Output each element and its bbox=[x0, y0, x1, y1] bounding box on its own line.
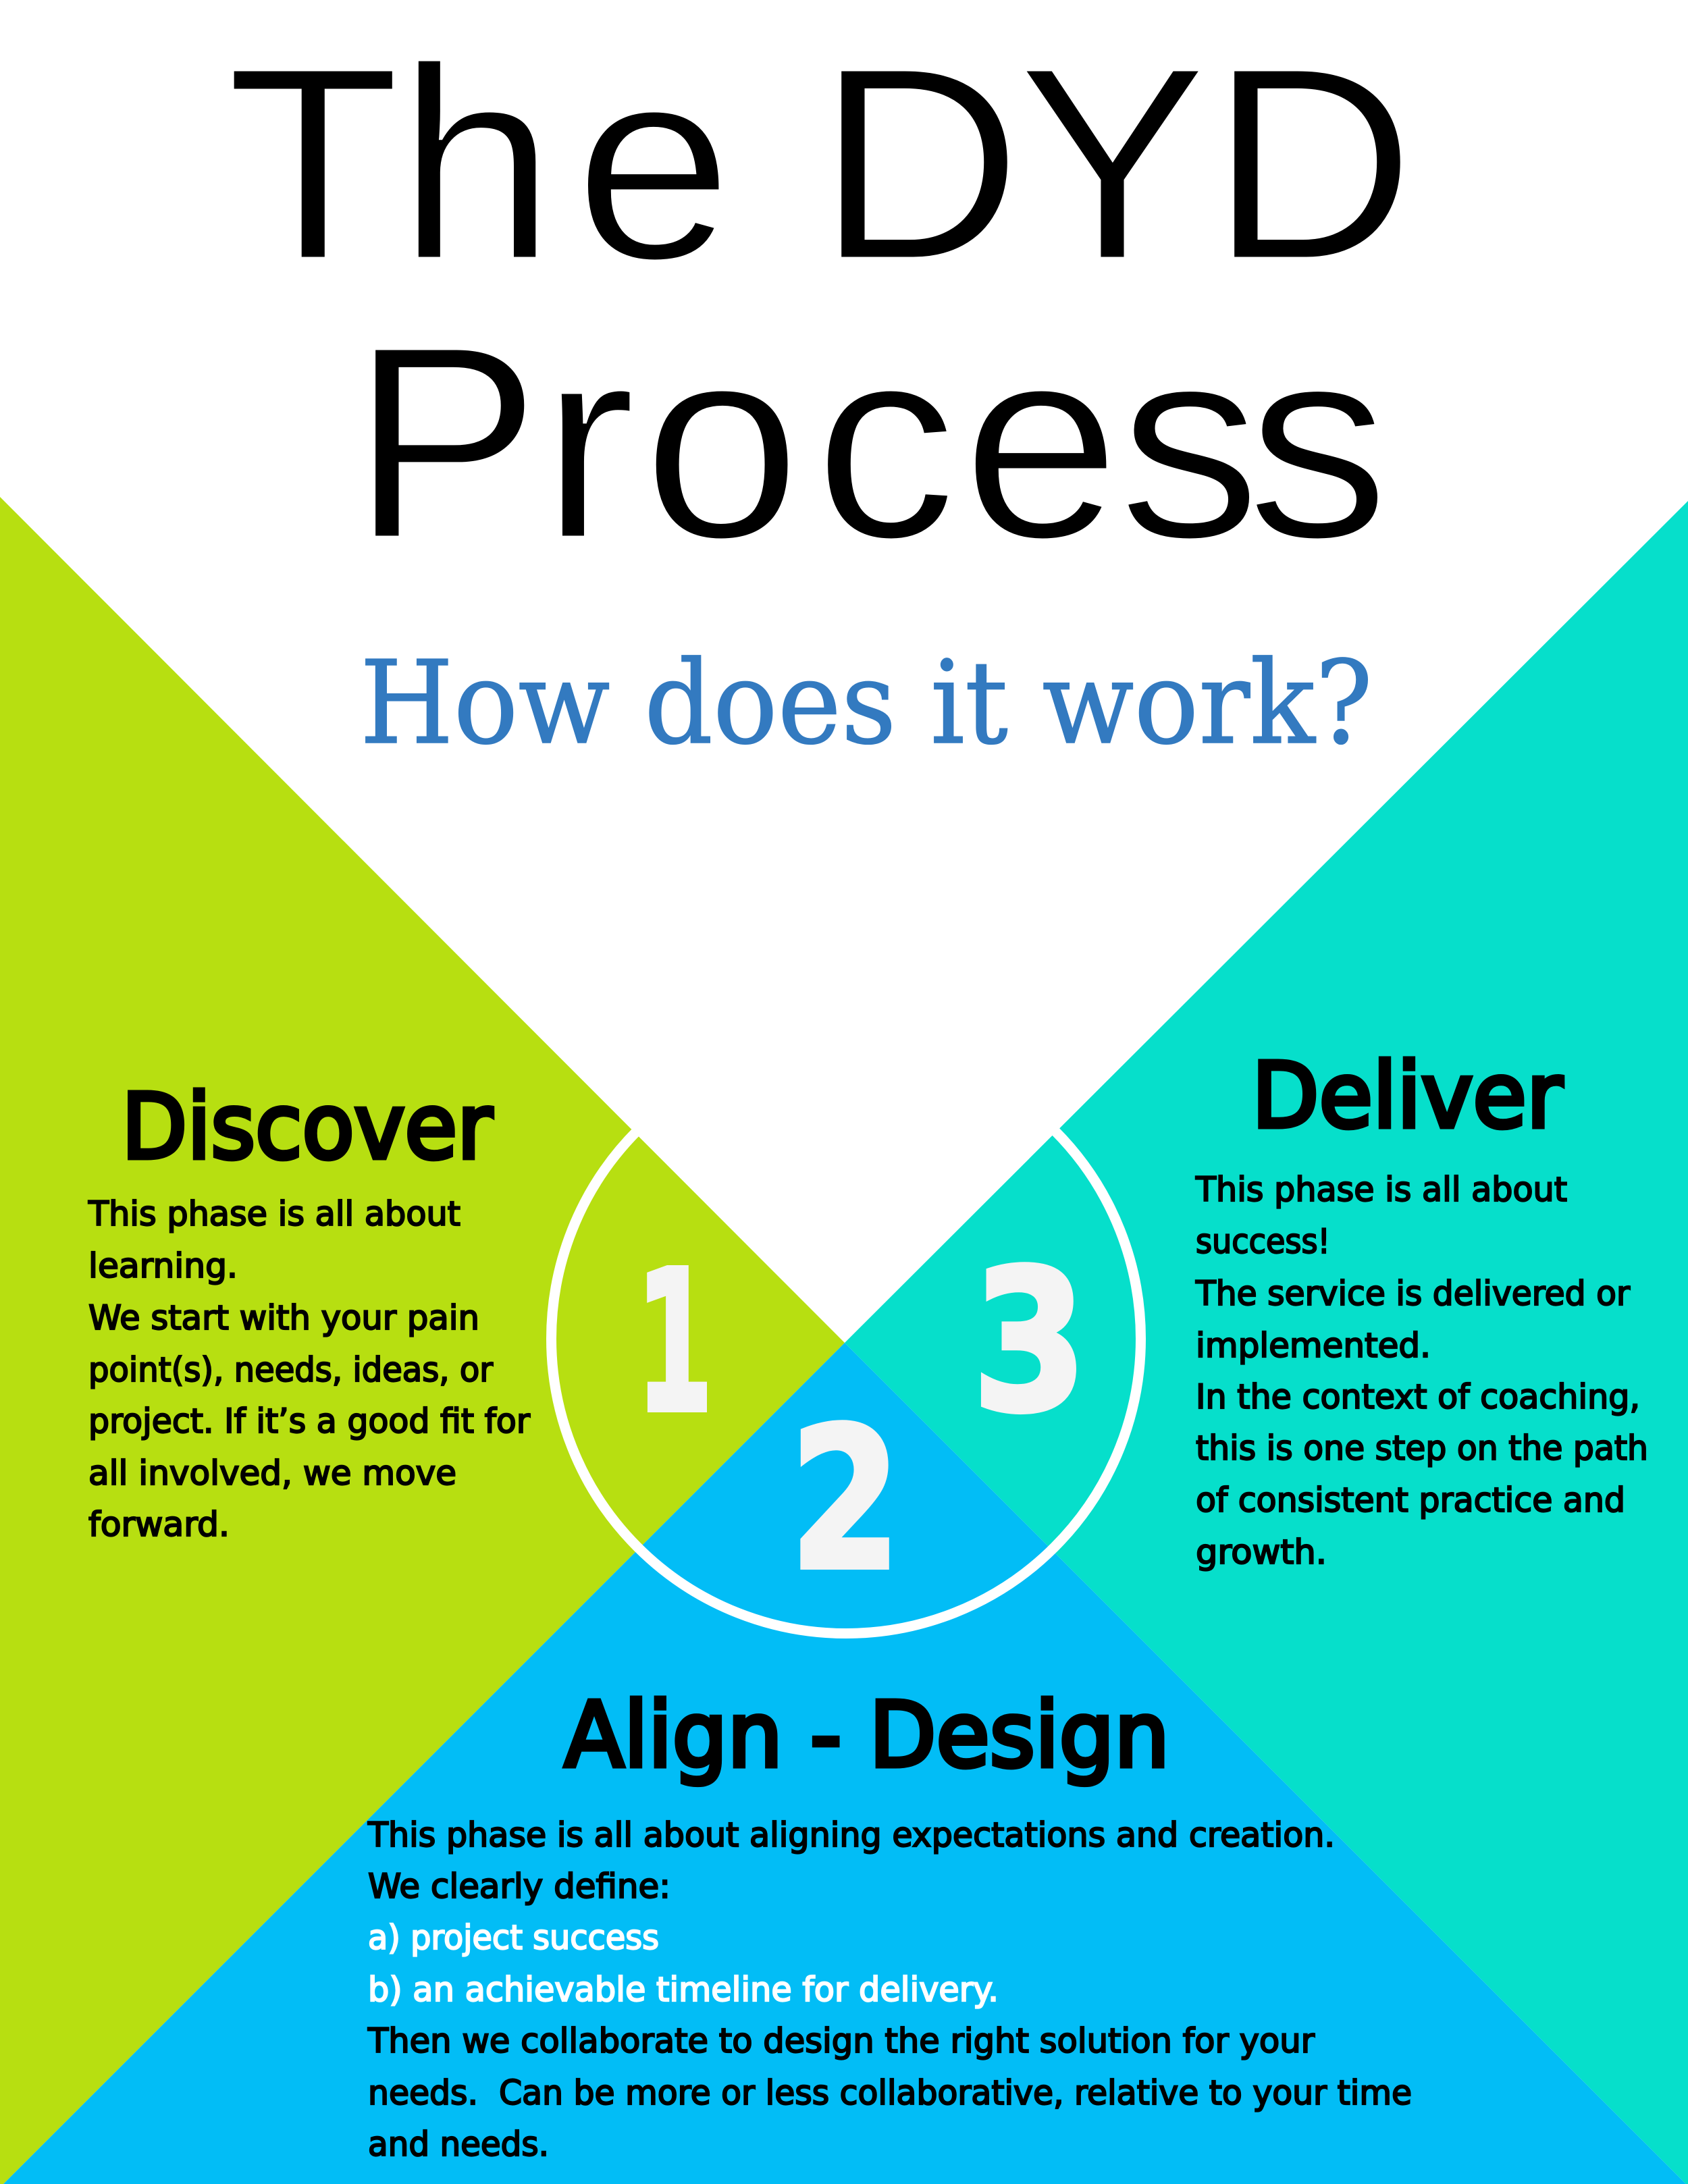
text block: deliver description: growth. bbox=[1196, 1533, 1327, 1572]
heading: Discover: Discover bbox=[122, 1075, 492, 1179]
text block: deliver description: The service is delivered or bbox=[1195, 1274, 1631, 1313]
text block: deliver description: In the context of coaching, bbox=[1196, 1377, 1640, 1416]
text block: deliver description: implemented. bbox=[1196, 1326, 1431, 1365]
panel: discover green triangle bbox=[0, 497, 845, 2184]
text block: discover description: We start with your pain bbox=[88, 1298, 479, 1337]
text block: deliver description: of consistent practice and bbox=[1196, 1481, 1625, 1520]
panel: deliver teal triangle bbox=[845, 501, 1688, 2184]
title: The DYD Process bbox=[226, 9, 1416, 595]
heading: Deliver: Deliver bbox=[1252, 1044, 1562, 1148]
text block: discover description: forward. bbox=[88, 1505, 230, 1544]
text block: discover description: This phase is all about bbox=[88, 1194, 460, 1233]
text block: align design description: and needs. bbox=[368, 2125, 549, 2164]
text block: align design description bbox=[367, 1815, 1412, 2164]
text block: discover description bbox=[88, 1194, 531, 1544]
text block: align design description: needs. Can be more or less collaborative, relative to your time bbox=[368, 2073, 1412, 2112]
text block: discover description: learning. bbox=[88, 1246, 238, 1285]
text block: deliver description bbox=[1195, 1170, 1648, 1572]
circle ring bbox=[551, 1044, 1141, 1634]
text block: deliver description: This phase is all about bbox=[1195, 1170, 1567, 1209]
text block: deliver description: success! bbox=[1196, 1222, 1330, 1261]
number 3: 3 bbox=[972, 1229, 1087, 1455]
subtitle: How does it work?: How does it work? bbox=[360, 637, 1373, 770]
heading: Align - Design: Align - Design bbox=[564, 1684, 1169, 1788]
text block: discover description: all involved, we move bbox=[88, 1454, 456, 1493]
title: The DYD Process: The DYD bbox=[226, 9, 1416, 317]
title: The DYD Process: Process bbox=[350, 288, 1390, 595]
text block: align design description: This phase is all about aligning expectations and creation. bbox=[367, 1815, 1335, 1855]
panel: align design blue triangle bbox=[0, 1343, 1688, 2184]
text block: deliver description: this is one step on the path bbox=[1196, 1429, 1648, 1468]
text block: discover description: point(s), needs, ideas, or bbox=[88, 1350, 494, 1389]
number 1: 1 bbox=[636, 1229, 713, 1456]
text block: discover description: project. If it’s a good fit for bbox=[88, 1402, 531, 1441]
number 2: 2 bbox=[790, 1387, 901, 1613]
text block: align design description: We clearly define: bbox=[368, 1867, 670, 1906]
text block: align design description: b) an achievable timeline for delivery. bbox=[368, 1970, 999, 2009]
text block: align design description: Then we collaborate to design the right solution for your bbox=[367, 2021, 1315, 2060]
text block: align design description: a) project success bbox=[368, 1918, 659, 1957]
